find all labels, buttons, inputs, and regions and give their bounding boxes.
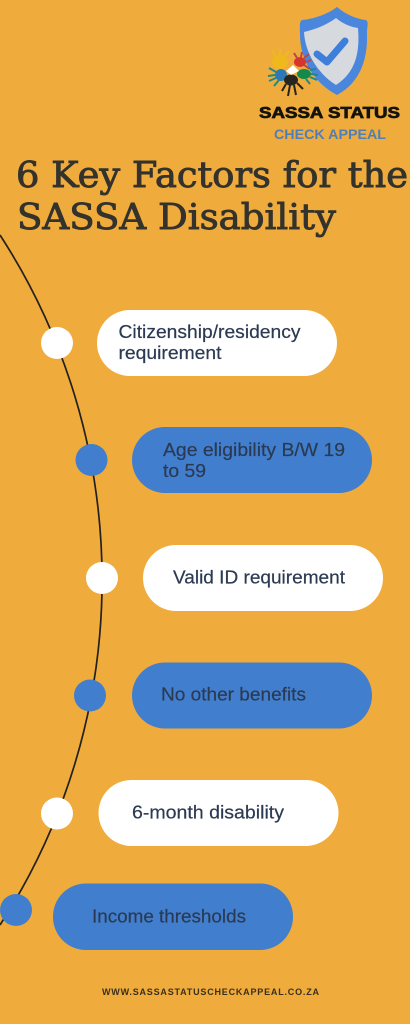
title <box>16 155 408 238</box>
logo subtitle: CHECK APPEAL <box>274 127 386 142</box>
item 2: age eligibility: Age eligibility B/W 19 <box>163 439 345 460</box>
item 6: income thresholds <box>0 884 293 950</box>
item 4: no other benefits: No other benefits <box>161 684 306 704</box>
title: SASSA Disability <box>17 197 336 238</box>
item 6: income thresholds: Income thresholds <box>92 906 246 926</box>
item 5: 6-month disability: 6-month disability <box>132 802 285 822</box>
logo name: SASSA STATUS <box>259 105 400 122</box>
icon: coloured hands emblem <box>268 49 318 96</box>
logo <box>259 7 400 142</box>
item 1: citizenship: Citizenship/residency <box>118 321 301 342</box>
item 3: valid ID: Valid ID requirement <box>173 566 345 588</box>
item 2: age eligibility <box>76 427 372 493</box>
item 3: valid ID <box>86 545 383 611</box>
icon: shield with check mark <box>300 7 368 95</box>
item 5: 6-month disability <box>41 780 338 846</box>
timeline curve <box>0 235 102 925</box>
title: 6 Key Factors for the <box>16 155 408 196</box>
footer website: WWW.SASSASTATUSCHECKAPPEAL.CO.ZA <box>102 987 320 997</box>
item 1: citizenship <box>41 310 337 376</box>
item 1: citizenship: requirement <box>118 342 222 363</box>
item 2: age eligibility: to 59 <box>163 460 206 481</box>
item 4: no other benefits <box>74 662 372 728</box>
